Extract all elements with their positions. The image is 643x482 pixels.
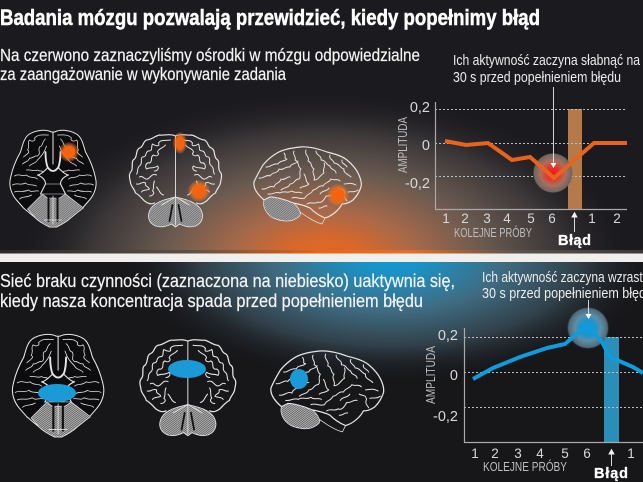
- line chart: blue amplitude: 5: [561, 446, 569, 461]
- text block: bottom intro: kiedy nasza koncentracja spada przed popełnieniem błędu: [0, 291, 423, 311]
- line chart: orange amplitude: [395, 87, 627, 249]
- brain: front view with orange spots: [129, 132, 222, 227]
- line chart: blue amplitude: AMPLITUDA: [423, 346, 438, 404]
- line chart: blue amplitude: [423, 300, 643, 482]
- brain: front view with blue spot: [140, 340, 236, 436]
- line chart: blue amplitude: 0,2: [438, 328, 458, 344]
- error bar: [568, 109, 582, 209]
- line chart: orange amplitude: 2: [461, 211, 469, 226]
- line chart: orange amplitude: 1: [588, 211, 596, 226]
- line chart: orange amplitude: AMPLITUDA: [395, 117, 410, 173]
- line chart: orange amplitude: KOLEJNE PRÓBY: [454, 225, 532, 240]
- line chart: orange amplitude: 0: [422, 138, 430, 154]
- line chart: blue amplitude: 2: [491, 446, 499, 461]
- text block: bottom chart caption: [482, 269, 643, 302]
- line chart: orange amplitude: 1: [442, 211, 450, 226]
- line chart: orange amplitude: 0,2: [410, 100, 430, 116]
- line chart: blue amplitude: 1: [471, 446, 479, 461]
- line chart: orange amplitude: 2: [613, 211, 621, 226]
- line chart: orange amplitude: -0,2: [405, 176, 430, 192]
- line chart: blue amplitude: Błąd: [594, 466, 628, 482]
- line chart: blue amplitude: 4: [536, 446, 544, 461]
- line chart: orange amplitude: 4: [503, 211, 511, 226]
- line chart: orange amplitude: Błąd: [558, 233, 591, 249]
- panel: white divider strip: [0, 254, 643, 262]
- text block: bottom intro: [0, 271, 455, 311]
- line chart: orange amplitude: 3: [483, 211, 491, 226]
- brain: bottom view with orange spot: [10, 130, 96, 227]
- line chart: blue amplitude: 1: [627, 446, 635, 461]
- line chart: blue amplitude: KOLEJNE PRÓBY: [483, 459, 567, 474]
- line chart: orange amplitude: 6: [548, 211, 556, 226]
- text block: top intro: [0, 45, 420, 84]
- line chart: blue amplitude: 6: [583, 446, 591, 461]
- line chart: blue amplitude: -0,2: [433, 409, 458, 425]
- brain: side view with blue spot: [271, 351, 384, 432]
- text block: top intro: Na czerwono zaznaczyliśmy ośrodki w mózgu odpowiedzialne: [0, 45, 420, 65]
- text block: bottom intro: Sieć braku czynności (zaznaczona na niebiesko) uaktywnia się,: [0, 271, 455, 291]
- line chart: blue amplitude: 0: [450, 368, 458, 384]
- line chart: blue amplitude: 3: [514, 446, 522, 461]
- text block: top intro: za zaangażowanie w wykonywanie zadania: [0, 64, 286, 84]
- brain: side view with orange spot: [254, 147, 361, 224]
- line chart: orange amplitude: 5: [527, 211, 535, 226]
- panel: bottom background: [0, 262, 643, 482]
- panel: top background: [0, 0, 643, 254]
- title: Badania mózgu pozwalają przewidzieć, kiedy popełnimy błąd: [0, 5, 540, 30]
- error bar: [604, 337, 619, 442]
- brain: bottom view with blue spot: [12, 334, 104, 437]
- text block: top chart caption: [453, 52, 641, 86]
